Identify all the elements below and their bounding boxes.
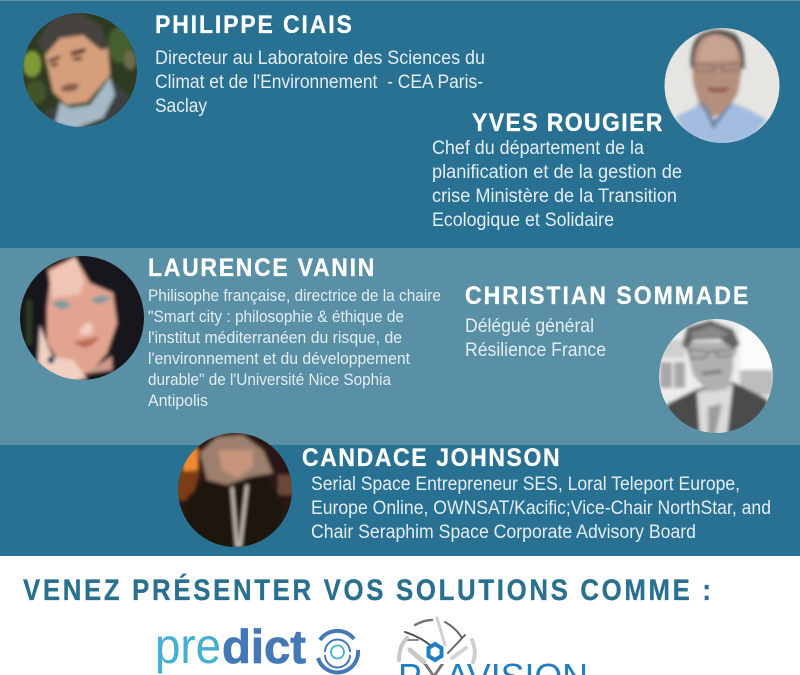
portrait: Yves Rougier	[664, 28, 780, 143]
portrait: Philippe Ciais	[20, 10, 140, 130]
role description: Saclay	[155, 96, 207, 117]
portrait: Christian Sommade	[659, 319, 773, 433]
speaker: Christian Sommade	[465, 282, 777, 440]
speaker: Candace Johnson	[174, 429, 771, 552]
panel: bottom speaker band	[0, 445, 800, 556]
role description	[311, 474, 771, 543]
role description: Antipolis	[148, 392, 208, 410]
logo: predict	[155, 618, 358, 674]
panel: middle speakers band	[0, 248, 800, 445]
role description: l'institut méditerranéen du risque, de	[148, 329, 402, 347]
name: LAURENCE VANIN	[148, 254, 374, 282]
panel: top speakers band	[0, 0, 800, 248]
speaker: Philippe Ciais	[20, 10, 485, 130]
logo wordmark: dict: dict	[222, 620, 306, 673]
logo icon: concentric spiral	[318, 631, 358, 672]
role description	[148, 287, 441, 410]
role description: durable" de l'Université Nice Sophia	[148, 371, 392, 389]
speaker: Laurence Vanin	[16, 252, 441, 410]
role description	[155, 48, 485, 117]
portrait: Candace Johnson	[178, 433, 292, 547]
logo wordmark: pre: pre	[155, 618, 221, 674]
role description: Climat et de l'Environnement - CEA Paris-	[155, 72, 483, 93]
name: YVES ROUGIER	[472, 109, 662, 137]
panel: top edge strip	[0, 0, 800, 1]
portrait: Laurence Vanin	[20, 256, 144, 380]
role description: "Smart city : philosophie & éthique de	[148, 308, 404, 326]
name: CHRISTIAN SOMMADE	[465, 282, 748, 310]
name: PHILIPPE CIAIS	[155, 11, 352, 39]
role description: planification et de la gestion de	[432, 162, 682, 183]
role description	[432, 138, 682, 231]
role description: Serial Space Entrepreneur SES, Loral Teleport Europe,	[311, 474, 740, 495]
logo icon: camera shutter	[399, 618, 475, 662]
role description: Résilience France	[465, 340, 606, 361]
role description: Europe Online, OWNSAT/Kacific;Vice-Chair NorthStar, and	[311, 498, 771, 519]
role description	[465, 316, 606, 361]
name: CANDACE JOHNSON	[302, 444, 560, 472]
role description: Chair Seraphim Space Corporate Advisory Board	[311, 522, 696, 543]
role description: crise Ministère de la Transition	[432, 186, 677, 207]
role description: Délégué général	[465, 316, 594, 337]
role description: l'environnement et du développement	[148, 350, 410, 368]
logo: pxavision	[398, 618, 588, 675]
role description: Chef du département de la	[432, 138, 644, 159]
speaker: Yves Rougier	[432, 24, 784, 231]
heading: call to action: VENEZ PRÉSENTER VOS SOLUTIONS COMME :	[23, 573, 711, 606]
role description: Directeur au Laboratoire des Sciences du	[155, 48, 485, 69]
role description: Ecologique et Solidaire	[432, 210, 614, 231]
role description: Philisophe française, directrice de la chaire	[148, 287, 441, 305]
